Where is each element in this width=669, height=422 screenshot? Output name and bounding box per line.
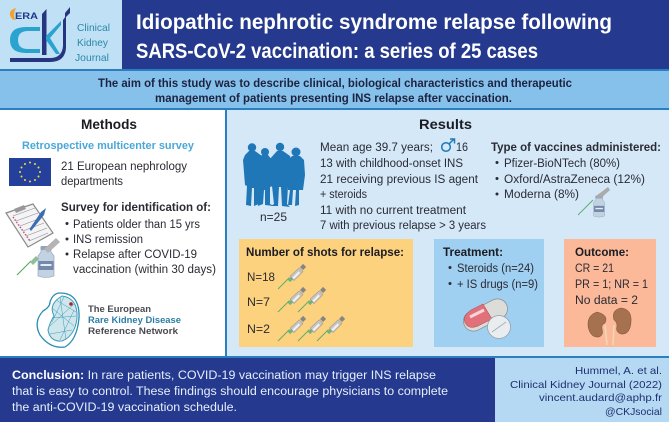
text: patient characteristics: + steroids	[320, 189, 367, 201]
icon: CKJ monogram	[10, 7, 70, 62]
text: conclusion	[12, 370, 448, 414]
text: journal name: Kidney	[77, 37, 109, 49]
text: survey criteria: INS remission	[73, 234, 143, 246]
text: citation: @CKJsocial	[605, 406, 662, 418]
text: patient characteristics: 7 with previous relapse > 3 years	[320, 220, 486, 232]
text: survey criteria: Patients older than 15 yrs	[73, 219, 200, 231]
text: aim: The aim of this study was to describe clinical, biological characteristics and therapeutic	[98, 76, 572, 90]
heading: shots: Number of shots for relapse:	[246, 245, 404, 259]
text: treatment list: Steroids (n=24)	[457, 263, 534, 275]
text: vaccine types: Moderna (8%)	[504, 189, 579, 201]
heading: outcome: Outcome:	[575, 245, 629, 259]
panel: results	[225, 110, 669, 356]
text: vaccine types: Type of vaccines administered:	[491, 140, 661, 154]
icon: vaccine vial small	[578, 187, 610, 217]
text: citation	[510, 365, 663, 418]
panel: treatment	[434, 239, 544, 347]
icon: rare kidney network logo	[37, 293, 79, 347]
text: network name: The European	[88, 304, 151, 315]
text: survey criteria: vaccination (within 30 days)	[73, 264, 216, 276]
icon: kidneys	[588, 308, 631, 345]
text: treatment list: + IS drugs (n=9)	[457, 279, 538, 291]
text: outcome values	[575, 263, 648, 307]
text: aim: management of patients presenting INS relapse after vaccination.	[155, 91, 512, 105]
heading: treatment: Treatment:	[443, 245, 503, 259]
text: departments: departments	[61, 176, 123, 188]
panel: journal logo	[0, 0, 122, 69]
text: survey criteria: Survey for identification of:	[61, 200, 211, 214]
text: outcome values: PR = 1; NR = 1	[575, 279, 648, 291]
text: N=2 with three syringes: N=2	[247, 324, 270, 336]
icon: pills	[460, 295, 511, 338]
panel: citation	[495, 358, 669, 422]
subheading: survey type: Retrospective multicenter survey	[22, 140, 195, 152]
title: SARS-CoV-2 vaccination: a series of 25 cases	[136, 40, 538, 63]
text: vaccine types: Oxford/AstraZeneca (12%)	[504, 174, 645, 186]
icon: vaccine vial	[17, 238, 60, 278]
text: n=25: n=25	[260, 212, 287, 224]
text: patient characteristics	[320, 142, 486, 232]
heading: results: Results	[419, 117, 472, 132]
text: survey criteria	[61, 200, 216, 276]
text: network name: Rare Kidney Disease	[88, 315, 181, 326]
text: N=2 with three syringes	[247, 316, 345, 341]
text: departments	[61, 161, 187, 188]
text: patient characteristics: 21 receiving previous IS agent	[320, 174, 479, 186]
panel: title banner	[122, 0, 669, 69]
text: patient characteristics: 11 with no current treatment	[320, 205, 467, 217]
icon: ERA logo: ERA	[15, 11, 38, 22]
title: Idiopathic nephrotic syndrome relapse following	[136, 11, 612, 34]
text: network name	[88, 304, 181, 337]
icon: group of patients	[243, 143, 305, 207]
text: aim	[98, 76, 572, 105]
text: N=7 with two syringes	[247, 287, 326, 312]
text: patient characteristics: 13 with childhood-onset INS	[320, 158, 463, 170]
text: conclusion: the anti-COVID-19 vaccination schedule.	[12, 402, 237, 414]
text: N=7 with two syringes: N=7	[247, 297, 270, 309]
text: patient characteristics: 16	[456, 142, 468, 154]
text: N=18 with one syringe	[247, 264, 306, 289]
text: journal name: Clinical	[77, 22, 110, 34]
heading: methods: Methods	[81, 117, 137, 132]
icon: male symbol	[442, 139, 454, 151]
text: survey criteria: Relapse after COVID-19	[73, 249, 197, 261]
text: network name: Reference Network	[88, 326, 179, 337]
text: N=18 with one syringe: N=18	[247, 272, 275, 284]
text: citation: Clinical Kidney Journal (2022)	[510, 379, 662, 391]
text: treatment list	[448, 263, 538, 291]
text: departments: 21 European nephrology	[61, 161, 187, 173]
title	[136, 11, 612, 63]
text: patient characteristics: Mean age 39.7 years;	[320, 142, 433, 154]
text: outcome values: No data = 2	[575, 295, 638, 307]
text: citation: Hummel, A. et al.	[575, 365, 662, 377]
panel: conclusion	[0, 356, 669, 422]
icon: clipboard	[6, 204, 53, 247]
panel: methods	[0, 110, 225, 356]
text: journal name: Journal	[75, 52, 109, 64]
text: conclusion: that is easy to control. These findings should encourage physicians to complete	[12, 386, 448, 398]
icon: EU flag	[9, 158, 51, 186]
text: vaccine types	[491, 140, 661, 201]
text: conclusion: Conclusion: In rare patients, COVID-19 vaccination may trigger INS relapse	[12, 370, 436, 382]
panel: number of shots	[239, 239, 413, 347]
text: vaccine types: Pfizer-BioNTech (80%)	[504, 158, 620, 170]
text: citation: vincent.audard@aphp.fr	[539, 392, 663, 404]
panel: study aim	[0, 69, 669, 110]
text: outcome values: CR = 21	[575, 263, 614, 275]
text: journal name	[75, 22, 110, 64]
panel: outcome	[564, 239, 656, 347]
